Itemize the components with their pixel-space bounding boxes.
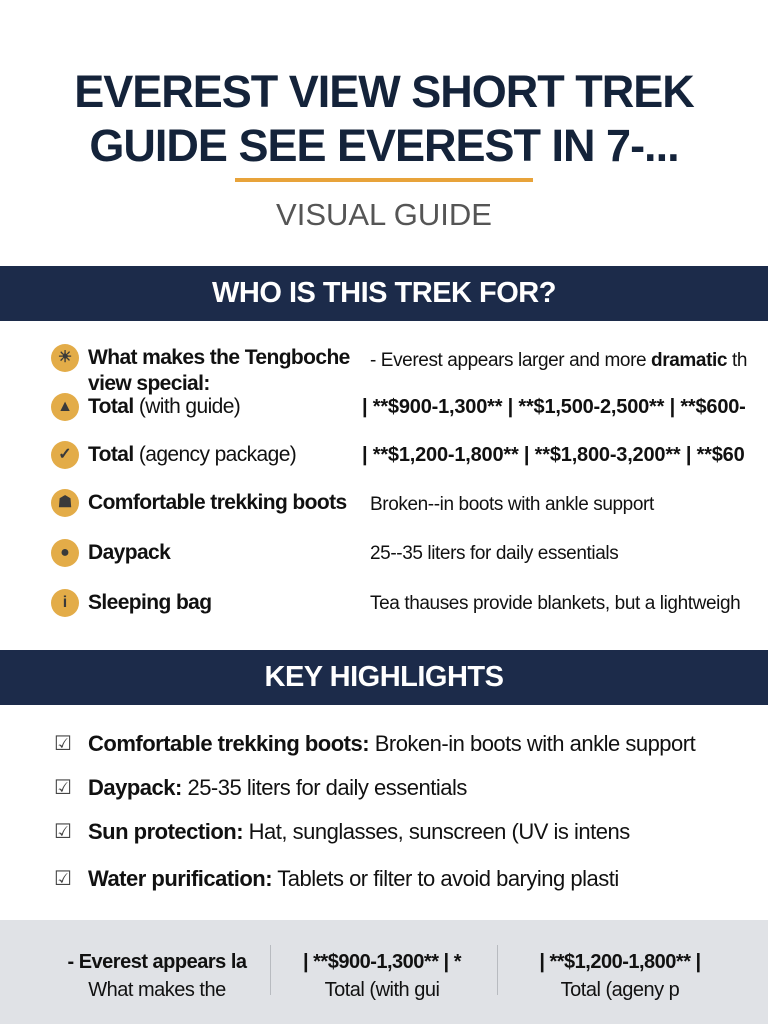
highlight 3: Sun protection: Hat, sunglasses, sunscreen (UV is intens xyxy=(88,819,630,844)
row label 3: Total (agency package) xyxy=(88,443,296,466)
section heading: who is this trek for: WHO IS THIS TREK FOR? xyxy=(212,277,556,309)
title xyxy=(74,66,694,171)
section heading: who is this trek for xyxy=(0,266,768,321)
highlight 4: Water purification: Tablets or filter to avoid barying plasti xyxy=(88,866,619,891)
icon: check: ✓ xyxy=(58,446,72,463)
icon: boots xyxy=(51,489,79,517)
row label 1 xyxy=(88,346,350,395)
row label 6: Sleeping bag xyxy=(88,591,212,614)
stat 1: What makes the xyxy=(88,979,226,1001)
icon: pin: ● xyxy=(60,544,70,561)
row value 2: | **$900-1,300** | **$1,500-2,500** | **$600- xyxy=(362,396,746,418)
footer stats panel xyxy=(0,920,768,1024)
icon: info xyxy=(51,589,79,617)
highlight 1: Comfortable trekking boots: Broken-in boots with ankle support xyxy=(88,731,695,756)
stat 1 xyxy=(68,951,248,1001)
highlight 3: ☑ xyxy=(54,821,72,843)
icon: mountain xyxy=(51,393,79,421)
icon: boots: ☗ xyxy=(58,494,72,511)
highlight 1: ☑ xyxy=(54,733,72,755)
icon: check xyxy=(51,441,79,469)
icon: pin xyxy=(51,539,79,567)
section heading: key highlights: KEY HIGHLIGHTS xyxy=(264,661,504,693)
icon: info: i xyxy=(63,594,67,611)
title: GUIDE SEE EVEREST IN 7-... xyxy=(89,120,679,171)
icon: sun mountain xyxy=(51,344,79,372)
row label 5: Daypack xyxy=(88,541,170,564)
stat 3: Total (ageny p xyxy=(561,979,679,1001)
icon: sun mountain: ☀ xyxy=(58,349,72,366)
row value 1: - Everest appears larger and more dramatic th xyxy=(370,350,747,371)
stat 3 xyxy=(539,951,701,1001)
row value 4: Broken--in boots with ankle support xyxy=(370,494,654,515)
stat 3: | **$1,200-1,800** | xyxy=(539,951,701,973)
row label 1: view special: xyxy=(88,372,210,395)
row label 1: What makes the Tengboche xyxy=(88,346,350,369)
subtitle: VISUAL GUIDE xyxy=(276,197,492,232)
stat 2: | **$900-1,300** | * xyxy=(303,951,461,973)
accent line xyxy=(235,178,533,182)
highlight 2: ☑ xyxy=(54,777,72,799)
stat 2 xyxy=(303,951,462,1001)
highlight 2: Daypack: 25-35 liters for daily essentials xyxy=(88,775,467,800)
section heading: key highlights xyxy=(0,650,768,705)
highlight 4: ☑ xyxy=(54,868,72,890)
row label 4: Comfortable trekking boots xyxy=(88,491,347,514)
icon: mountain: ▲ xyxy=(57,398,73,415)
title: EVEREST VIEW SHORT TREK xyxy=(74,66,694,117)
stat 2: Total (with gui xyxy=(325,979,439,1001)
stat 1: - Everest appears la xyxy=(68,951,246,973)
row label 2: Total (with guide) xyxy=(88,395,240,418)
row value 6: Tea thauses provide blankets, but a lightweigh xyxy=(370,593,740,614)
row value 5: 25--35 liters for daily essentials xyxy=(370,543,618,564)
row value 3: | **$1,200-1,800** | **$1,800-3,200** | **$60 xyxy=(362,444,745,466)
